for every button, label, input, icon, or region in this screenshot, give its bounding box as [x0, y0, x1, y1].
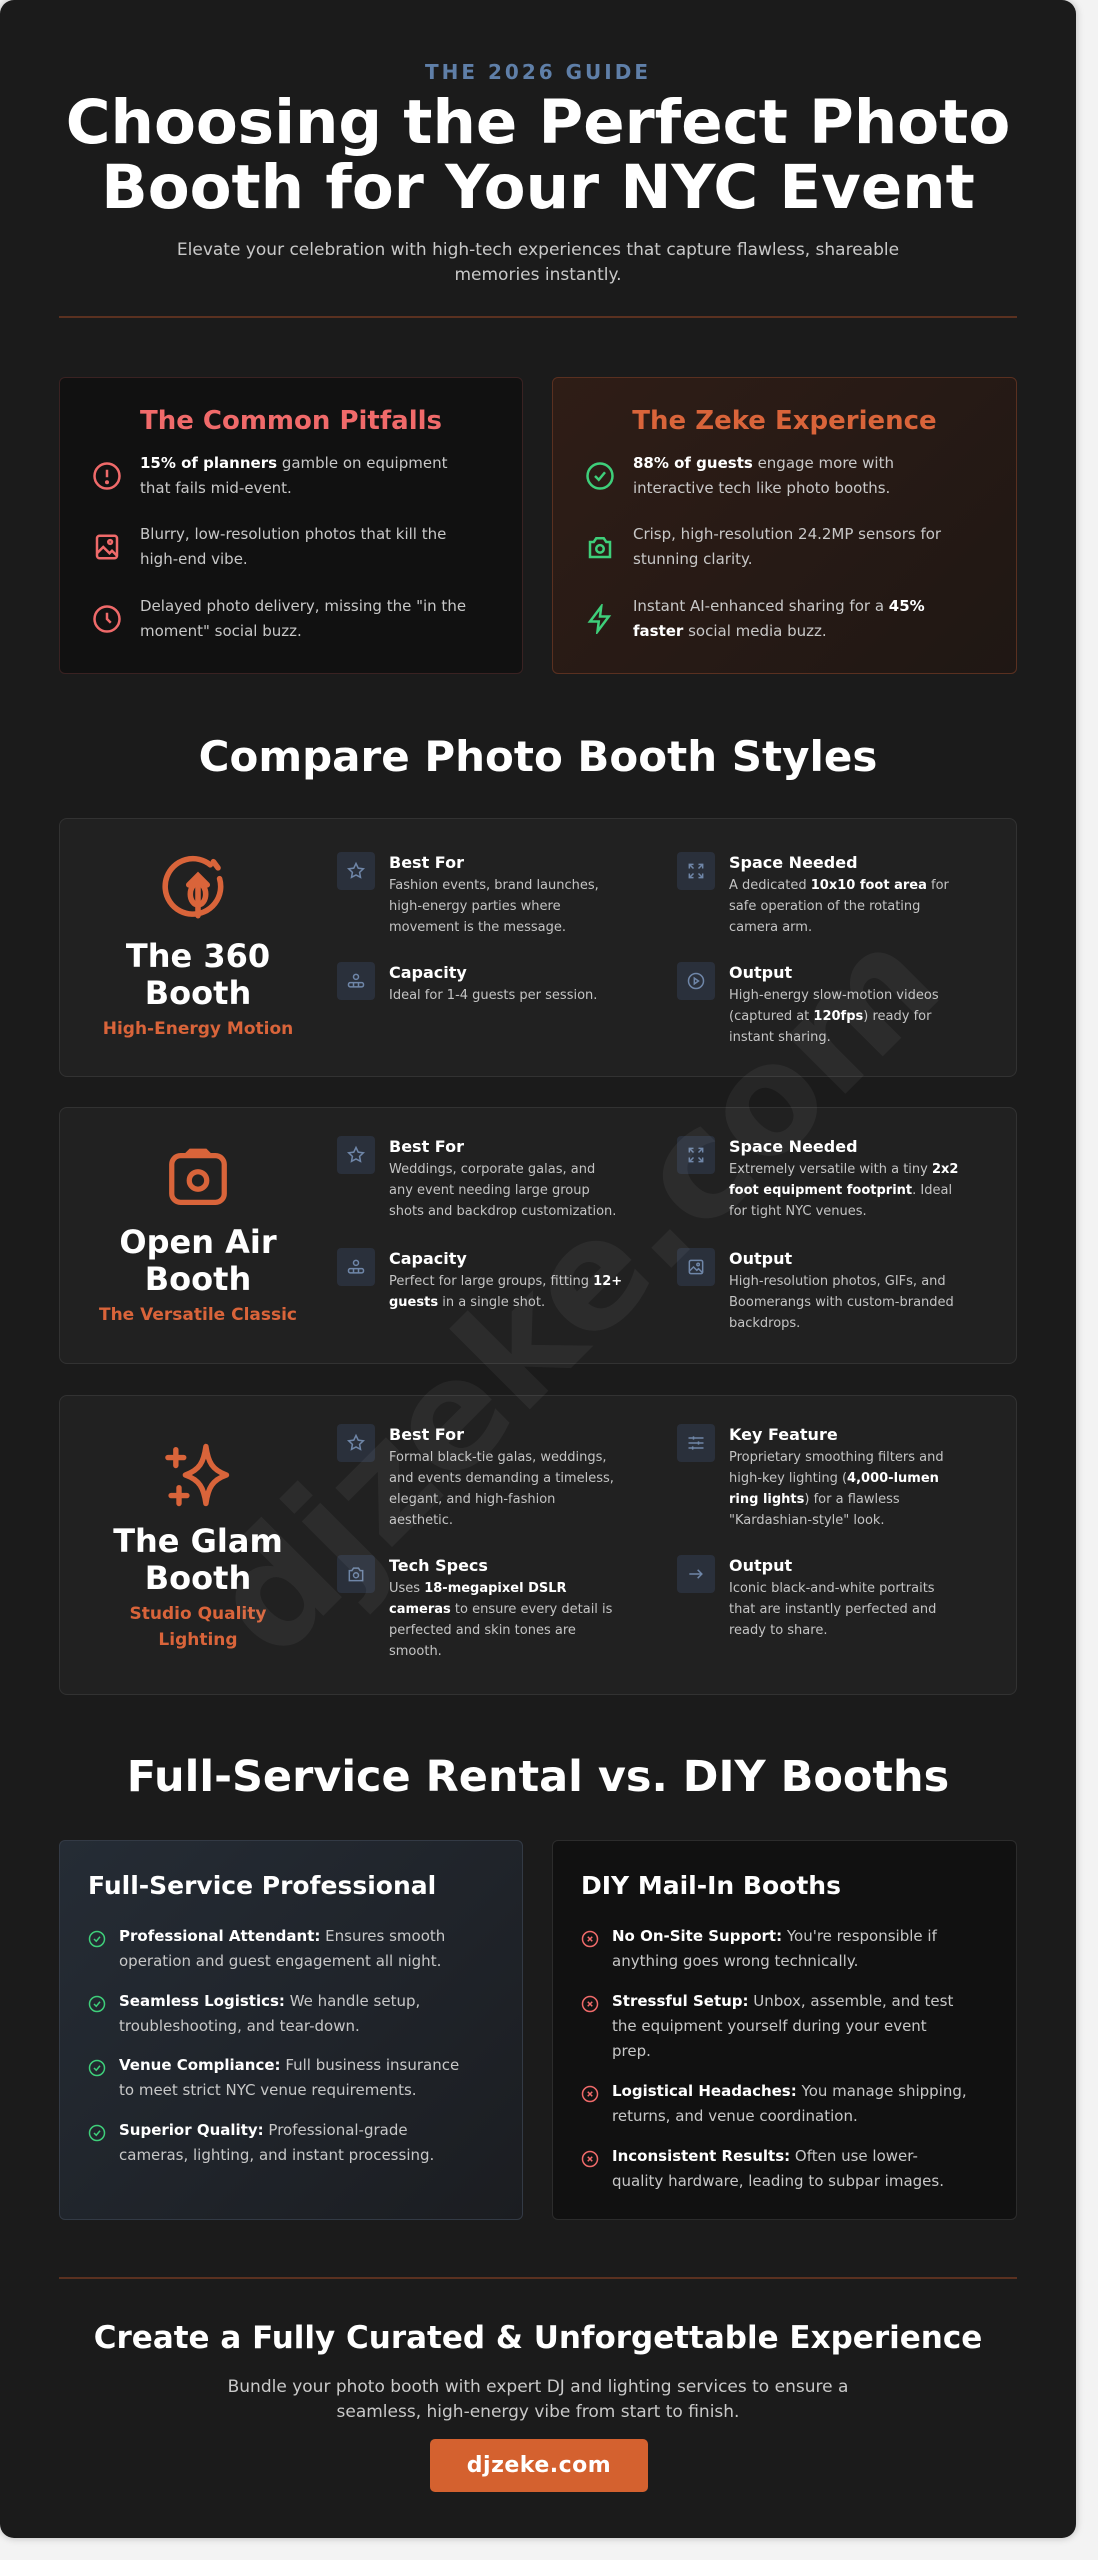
- feature: capacity: [337, 1248, 622, 1310]
- feature: key feature: [677, 1424, 944, 1528]
- heading: compare styles: Compare Photo Booth Styles: [199, 732, 877, 781]
- left: glam identity: Booth: [145, 1559, 251, 1597]
- feature: space: [677, 1136, 958, 1219]
- feature: key feature: Proprietary smoothing filters and high-key lighting (4,000-lumen ring lights) for a flawless "Kardashian-style" look.: [729, 1450, 944, 1528]
- feature: best for: [337, 852, 599, 935]
- feature: output: [677, 962, 939, 1045]
- feature: output: Output: [729, 963, 792, 982]
- zeke item 1: 88% of guests engage more with interactive tech like photo booths.: [633, 454, 894, 497]
- feature: best for: [337, 1424, 614, 1528]
- booth card: 360: [59, 818, 1017, 1077]
- icon: sparkle: [165, 1444, 230, 1506]
- feature: capacity: Ideal for 1-4 guests per session.: [389, 988, 597, 1003]
- left: 360 identity: The 360: [126, 936, 270, 974]
- booth card: open air: [59, 1107, 1017, 1364]
- feature: space: Space Needed: [729, 1137, 858, 1156]
- pro item 1: Professional Attendant: Ensures smooth operation and guest engagement all night.: [119, 1927, 445, 1970]
- heading: diy: DIY Mail-In Booths: [581, 1871, 841, 1900]
- feature: tech specs: Uses 18-megapixel DSLR cameras to ensure every detail is perfected and skin tones are smooth.: [389, 1581, 612, 1659]
- feature: best for: Fashion events, brand launches, high-energy parties where movement is the message.: [389, 878, 599, 935]
- diy item 3: Logistical Headaches: You manage shipping, returns, and venue coordination.: [612, 2082, 967, 2125]
- eyebrow: THE 2026 GUIDE: [425, 60, 651, 84]
- icon: 360: [162, 856, 224, 918]
- panel: common pitfalls: [59, 377, 523, 674]
- left: open air identity: [99, 1148, 297, 1324]
- heading: full-service: Full-Service Professional: [88, 1871, 436, 1900]
- left: glam identity: Lighting: [158, 1630, 238, 1650]
- feature: output: [677, 1555, 936, 1638]
- heading: pitfalls: The Common Pitfalls: [140, 406, 442, 436]
- left: open air identity: The Versatile Classic: [99, 1304, 297, 1324]
- pro item 2: Seamless Logistics: We handle setup, troubleshooting, and tear-down.: [119, 1992, 420, 2035]
- feature: capacity: Capacity: [389, 963, 467, 982]
- pitfall item 3: Delayed photo delivery, missing the "in the moment" social buzz.: [140, 597, 466, 640]
- feature: output: High-energy slow-motion videos (captured at 120fps) ready for instant sharing.: [729, 988, 939, 1045]
- feature: space: Extremely versatile with a tiny 2x2 foot equipment footprint. Ideal for tight NYC venues.: [729, 1162, 958, 1219]
- pro item 4: Superior Quality: Professional-grade cameras, lighting, and instant processing.: [119, 2121, 434, 2164]
- feature: best for: Best For: [389, 1425, 464, 1444]
- icon: camera: [169, 1148, 227, 1205]
- title: [66, 87, 1010, 223]
- panel: diy: [552, 1840, 1017, 2220]
- left: glam identity: The Glam: [113, 1522, 283, 1560]
- feature: output: Output: [729, 1556, 792, 1575]
- left: 360 identity: [103, 856, 293, 1038]
- feature: capacity: Perfect for large groups, fitting 12+ guests in a single shot.: [389, 1274, 622, 1310]
- left: 360 identity: High-Energy Motion: [103, 1018, 293, 1038]
- diy item 2: Stressful Setup: Unbox, assemble, and test the equipment yourself during your event prep.: [612, 1992, 953, 2060]
- diy item 1: No On-Site Support: You're responsible if anything goes wrong technically.: [612, 1927, 937, 1970]
- feature: capacity: Capacity: [389, 1249, 467, 1268]
- watermark: djzeke.com: [177, 894, 973, 1690]
- pitfall item 1: 15% of planners gamble on equipment that fails mid-event.: [140, 454, 447, 497]
- left: glam identity: [113, 1444, 283, 1650]
- pitfall item 2: Blurry, low-resolution photos that kill the high-end vibe.: [140, 525, 446, 568]
- feature: best for: Best For: [389, 1137, 464, 1156]
- diy item 4: Inconsistent Results: Often use lower-quality hardware, leading to subpar images.: [612, 2147, 944, 2190]
- cta button: djzeke.com: [467, 2453, 611, 2478]
- title: Choosing the Perfect Photo: [66, 87, 1010, 158]
- cta button: [430, 2439, 648, 2492]
- left: glam identity: Studio Quality: [130, 1604, 266, 1624]
- subtitle: Elevate your celebration with high-tech experiences that capture flawless, shareable memories instantly.: [177, 240, 899, 285]
- feature: best for: Weddings, corporate galas, and any event needing large group shots and backdrop customization.: [389, 1162, 616, 1219]
- zeke item 3: Instant AI-enhanced sharing for a 45% faster social media buzz.: [633, 597, 925, 640]
- heading: zeke: The Zeke Experience: [632, 406, 937, 436]
- feature: space: A dedicated 10x10 foot area for safe operation of the rotating camera arm.: [729, 878, 949, 935]
- zeke item 2: Crisp, high-resolution 24.2MP sensors for stunning clarity.: [633, 525, 941, 568]
- feature: capacity: [337, 962, 597, 1003]
- panel: full-service: [59, 1840, 523, 2220]
- feature: best for: Formal black-tie galas, weddings, and events demanding a timeless, elegant, and high-fashion aesthetic.: [389, 1450, 614, 1528]
- panel: zeke experience: [552, 377, 1017, 674]
- feature: space: [677, 852, 949, 935]
- feature: output: Iconic black-and-white portraits that are instantly perfected and ready to share.: [729, 1581, 936, 1638]
- feature: key feature: Key Feature: [729, 1425, 838, 1444]
- cta text: Bundle your photo booth with expert DJ and lighting services to ensure a seamless, high-energy vibe from start to finish.: [228, 2377, 848, 2422]
- feature: output: High-resolution photos, GIFs, and Boomerangs with custom-branded backdrops.: [729, 1274, 954, 1331]
- left: open air identity: Open Air: [119, 1222, 277, 1260]
- feature: output: [677, 1248, 954, 1331]
- cta heading: Create a Fully Curated & Unforgettable Experience: [94, 2320, 982, 2356]
- feature: tech specs: Tech Specs: [389, 1556, 488, 1575]
- feature: tech specs: [337, 1555, 612, 1659]
- feature: space: Space Needed: [729, 853, 858, 872]
- title: Booth for Your NYC Event: [101, 152, 975, 223]
- booth card: glam: [59, 1395, 1017, 1695]
- left: open air identity: Booth: [145, 1260, 251, 1298]
- feature: output: Output: [729, 1249, 792, 1268]
- left: 360 identity: Booth: [145, 974, 251, 1012]
- feature: best for: [337, 1136, 616, 1219]
- pro item 3: Venue Compliance: Full business insurance to meet strict NYC venue requirements.: [119, 2056, 459, 2099]
- heading: full service vs diy: Full-Service Rental vs. DIY Booths: [127, 1752, 949, 1802]
- feature: best for: Best For: [389, 853, 464, 872]
